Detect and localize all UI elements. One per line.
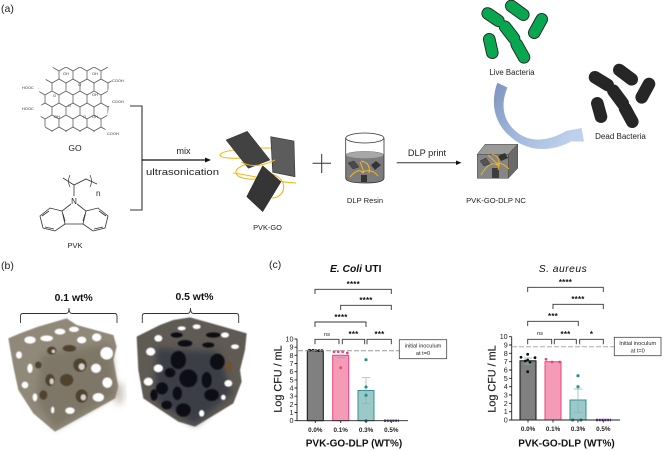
bracket: 0.1 wt%	[20, 308, 117, 323]
panel: GO chemical structure: OH	[63, 71, 69, 76]
y axis tick labels: 9	[290, 343, 294, 352]
label: DLP Resin: DLP Resin	[347, 196, 383, 205]
axes	[294, 339, 408, 423]
panel: GO chemical structure: O	[68, 103, 71, 108]
arrow: mix and ultrasonication: ultrasonication	[146, 167, 219, 177]
y axis tick labels: 6	[290, 367, 294, 376]
x axis tick labels: 0.3%	[571, 426, 586, 433]
photo: gyroid cube 0.5 wt%	[137, 317, 247, 427]
panel: GO chemical structure: O	[53, 93, 56, 98]
panel label (a): (a)	[1, 3, 14, 15]
bars	[307, 350, 374, 421]
panel: GO chemical structure: OH	[92, 114, 98, 119]
y axis tick labels: 1	[290, 408, 294, 417]
y axis tick labels: 4	[290, 384, 294, 392]
y axis tick labels: 9	[504, 340, 508, 350]
significance brackets: ***	[349, 330, 359, 339]
heading: 0.1 wt%: 0.1 wt%	[55, 293, 93, 304]
y axis tick labels: 0	[290, 416, 294, 425]
photo: gyroid cube 0.1 wt%	[8, 318, 124, 432]
x axis tick labels: 0.0%	[521, 426, 536, 433]
chart: E. coli UTI	[272, 264, 447, 450]
icon: live bacteria	[488, 6, 542, 57]
label: GO: GO	[68, 143, 82, 153]
callout: initial inoculum: initial inoculum	[405, 344, 442, 350]
panel: GO chemical structure: O	[78, 82, 81, 87]
significance brackets: ns	[537, 331, 543, 337]
significance brackets: ****	[334, 313, 348, 322]
y axis tick labels: 5	[290, 375, 294, 384]
significance brackets	[528, 278, 603, 344]
x axis title: PVK-GO-DLP (WT%)	[518, 438, 615, 450]
panel: GO chemical structure: HOOC	[22, 106, 34, 111]
significance brackets: ***	[375, 330, 385, 339]
significance brackets: ****	[359, 296, 373, 305]
y axis tick labels: 0	[504, 416, 508, 424]
y axis tick labels: 2	[290, 400, 294, 409]
significance brackets	[315, 280, 391, 344]
arrow: DLP print: DLP print	[408, 148, 447, 158]
label: PVK-GO-DLP NC: PVK-GO-DLP NC	[466, 196, 526, 205]
significance brackets: ****	[347, 280, 361, 289]
panel: GO chemical structure: OH	[54, 114, 60, 119]
panel: PVK chemical structure	[40, 175, 108, 231]
icon: PVK-GO-DLP printed cube	[477, 144, 518, 178]
axes	[509, 337, 620, 422]
panel: GO chemical structure: COOH	[112, 78, 124, 83]
arrow: mix and ultrasonication: mix	[176, 146, 191, 156]
panel: GO chemical structure	[22, 67, 124, 136]
bars	[520, 361, 586, 420]
panel label (b): (b)	[1, 260, 14, 272]
icon: PVK-GO sheets with polymer strands	[220, 131, 296, 212]
chart title: S. aureus	[539, 264, 587, 275]
panel: GO chemical structure: O	[83, 114, 86, 119]
panel: GO chemical structure: COOH	[107, 131, 119, 136]
y axis tick labels	[500, 332, 508, 424]
y axis tick labels: 4	[504, 382, 508, 391]
bracket: 0.5 wt%	[142, 308, 239, 323]
label: Dead Bacteria: Dead Bacteria	[595, 132, 646, 141]
label: Live Bacteria: Live Bacteria	[489, 68, 535, 77]
y axis tick labels	[286, 334, 294, 425]
x axis tick labels	[521, 426, 611, 433]
arrow: live to dead curved	[494, 83, 584, 149]
heading: 0.5 wt%: 0.5 wt%	[175, 292, 214, 303]
x axis tick labels: 0.5%	[596, 426, 611, 433]
x axis tick labels	[308, 427, 399, 434]
panel: GO chemical structure: OH	[92, 71, 98, 76]
panel label (c): (c)	[269, 259, 281, 271]
y axis tick labels: 10	[500, 332, 508, 341]
error bars and data points	[520, 353, 611, 422]
y axis tick labels: 2	[504, 399, 508, 408]
significance brackets: *	[590, 330, 594, 339]
panel: PVK chemical structure: N	[71, 197, 77, 206]
arrow: DLP print	[397, 148, 462, 165]
x axis title: PVK-GO-DLP (WT%)	[306, 438, 402, 450]
y axis tick labels: 3	[290, 392, 294, 401]
y axis tick labels: 5	[504, 374, 508, 383]
y axis tick labels: 6	[504, 366, 508, 374]
bracket joining GO and PVK	[130, 106, 142, 210]
significance brackets: ***	[561, 330, 571, 339]
error bars and data points	[308, 349, 399, 422]
dashed inoculum line	[298, 350, 399, 352]
x axis tick labels: 0.0%	[308, 427, 323, 434]
label: PVK-GO: PVK-GO	[253, 223, 282, 232]
x axis tick labels: 0.5%	[384, 427, 399, 434]
label: PVK: PVK	[67, 241, 83, 250]
significance brackets: ns	[324, 332, 330, 338]
icon: DLP resin beaker	[346, 133, 384, 183]
panel: PVK chemical structure: n	[96, 189, 100, 198]
dashed inoculum line	[512, 346, 614, 348]
y axis title: Log CFU / mL	[272, 345, 284, 413]
plus sign	[312, 154, 331, 173]
panel: GO chemical structure: COOH	[112, 99, 124, 104]
significance brackets: ****	[559, 278, 573, 287]
x axis tick labels: 0.1%	[334, 427, 348, 434]
chart title: E. Coli UTI	[330, 264, 382, 275]
significance brackets: ***	[548, 312, 559, 321]
panel: GO chemical structure: OH	[92, 92, 98, 97]
callout: initial inoculum: at t=0	[631, 348, 645, 354]
y axis tick labels: 8	[504, 349, 508, 358]
panel: GO chemical structure: HOOC	[22, 85, 34, 90]
y axis tick labels: 8	[290, 351, 294, 360]
callout: initial inoculum: at t=0	[416, 351, 430, 357]
icon: dead bacteria	[595, 70, 649, 122]
y axis tick labels: 10	[286, 334, 294, 344]
callout: initial inoculum: Initial inoculum	[619, 341, 657, 347]
y axis tick labels: 3	[504, 390, 508, 400]
x axis tick labels: 0.1%	[546, 426, 561, 433]
x axis tick labels: 0.3%	[359, 427, 374, 434]
callout: initial inoculum	[399, 340, 447, 359]
chart: S. aureus	[486, 264, 661, 450]
y axis tick labels: 7	[290, 359, 294, 368]
y axis tick labels: 1	[504, 407, 508, 416]
y axis tick labels: 7	[504, 357, 508, 366]
significance brackets: ****	[571, 295, 585, 304]
arrow: mix and ultrasonication	[142, 146, 219, 177]
callout: initial inoculum	[614, 337, 661, 356]
y axis title: Log CFU / mL	[486, 345, 498, 413]
